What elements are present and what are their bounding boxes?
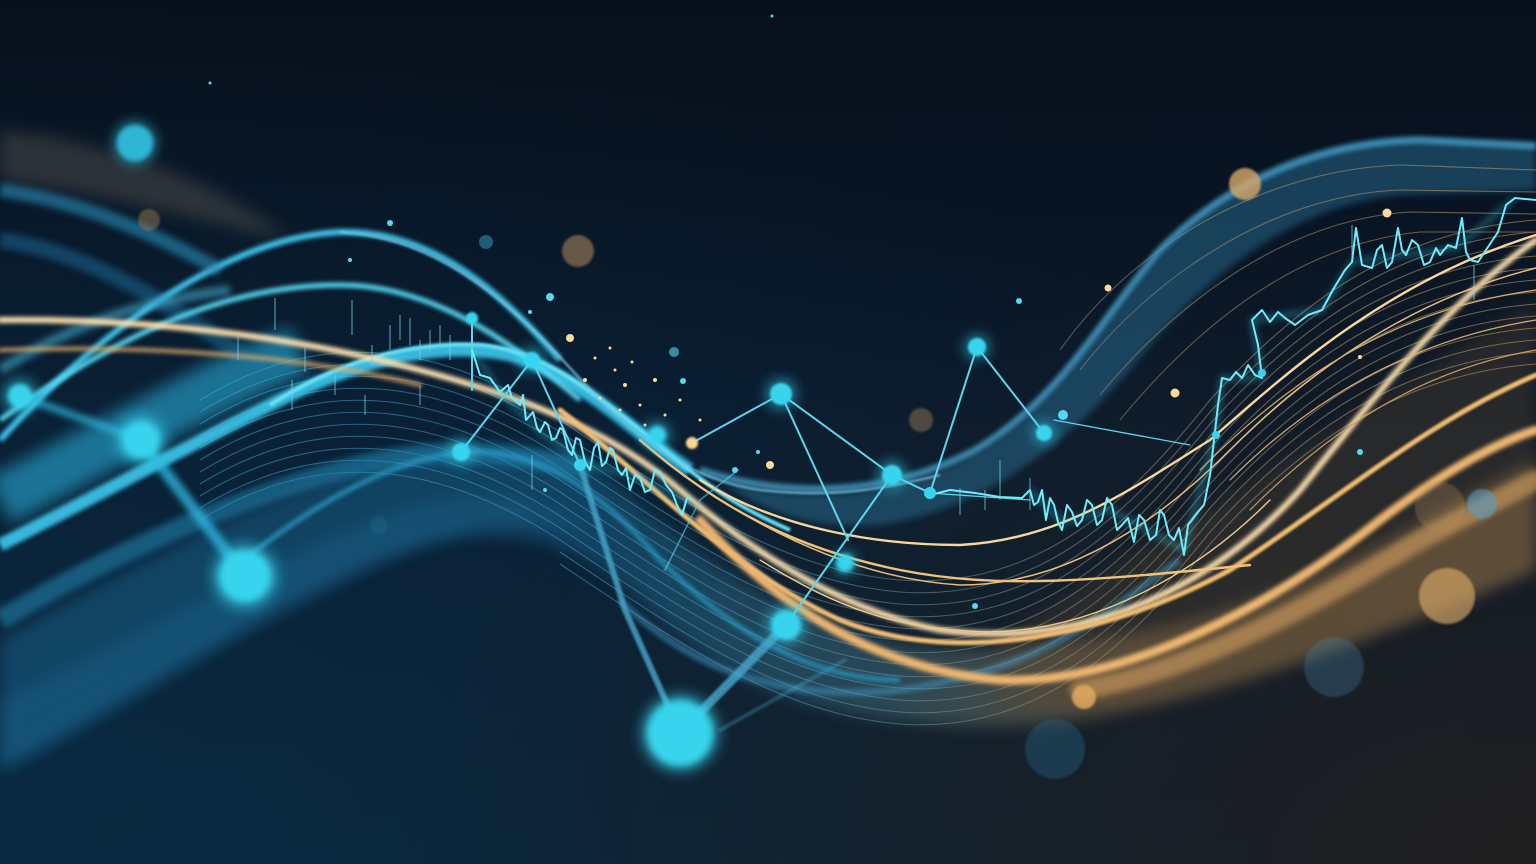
tick marks left <box>238 225 1474 515</box>
bokeh orbs <box>138 168 1497 779</box>
soft ribbon sheets <box>0 130 1536 770</box>
network connectors <box>20 318 1190 733</box>
particles <box>566 208 1392 469</box>
left cyan ribbons <box>0 190 940 680</box>
fine line mesh <box>200 165 1536 725</box>
back blue band right <box>620 140 1536 692</box>
network nodes <box>2 121 1266 773</box>
gold ribbons <box>0 235 1536 690</box>
jagged chart lines <box>472 198 1536 555</box>
